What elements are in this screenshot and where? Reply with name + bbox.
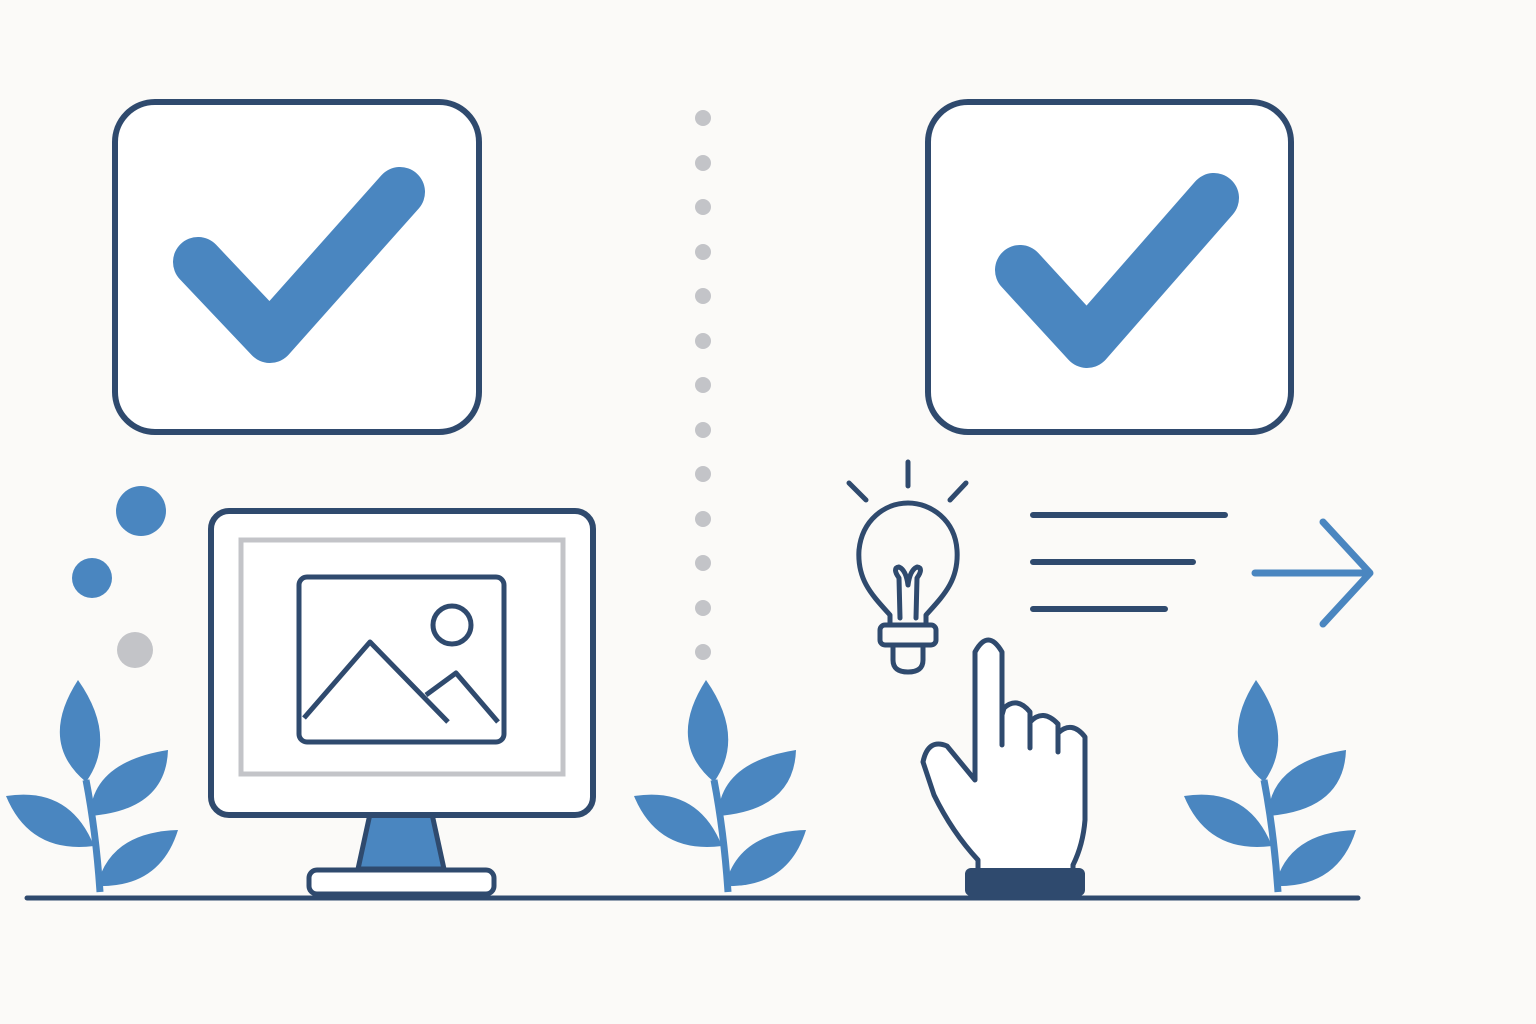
decorative dots <box>72 486 166 668</box>
text lines <box>1033 515 1225 609</box>
arrow <box>1255 522 1370 624</box>
icon: left check mark <box>198 192 400 338</box>
icon: right check mark <box>1020 198 1214 343</box>
panel: left checkbox <box>115 102 479 432</box>
ground line <box>27 896 1358 900</box>
icon: light bulb <box>849 462 966 672</box>
plants <box>6 680 1356 892</box>
dotted divider <box>695 110 711 660</box>
panel: right checkbox <box>928 102 1291 432</box>
icon: pointing hand <box>923 640 1085 896</box>
icon: monitor with image <box>211 511 593 894</box>
